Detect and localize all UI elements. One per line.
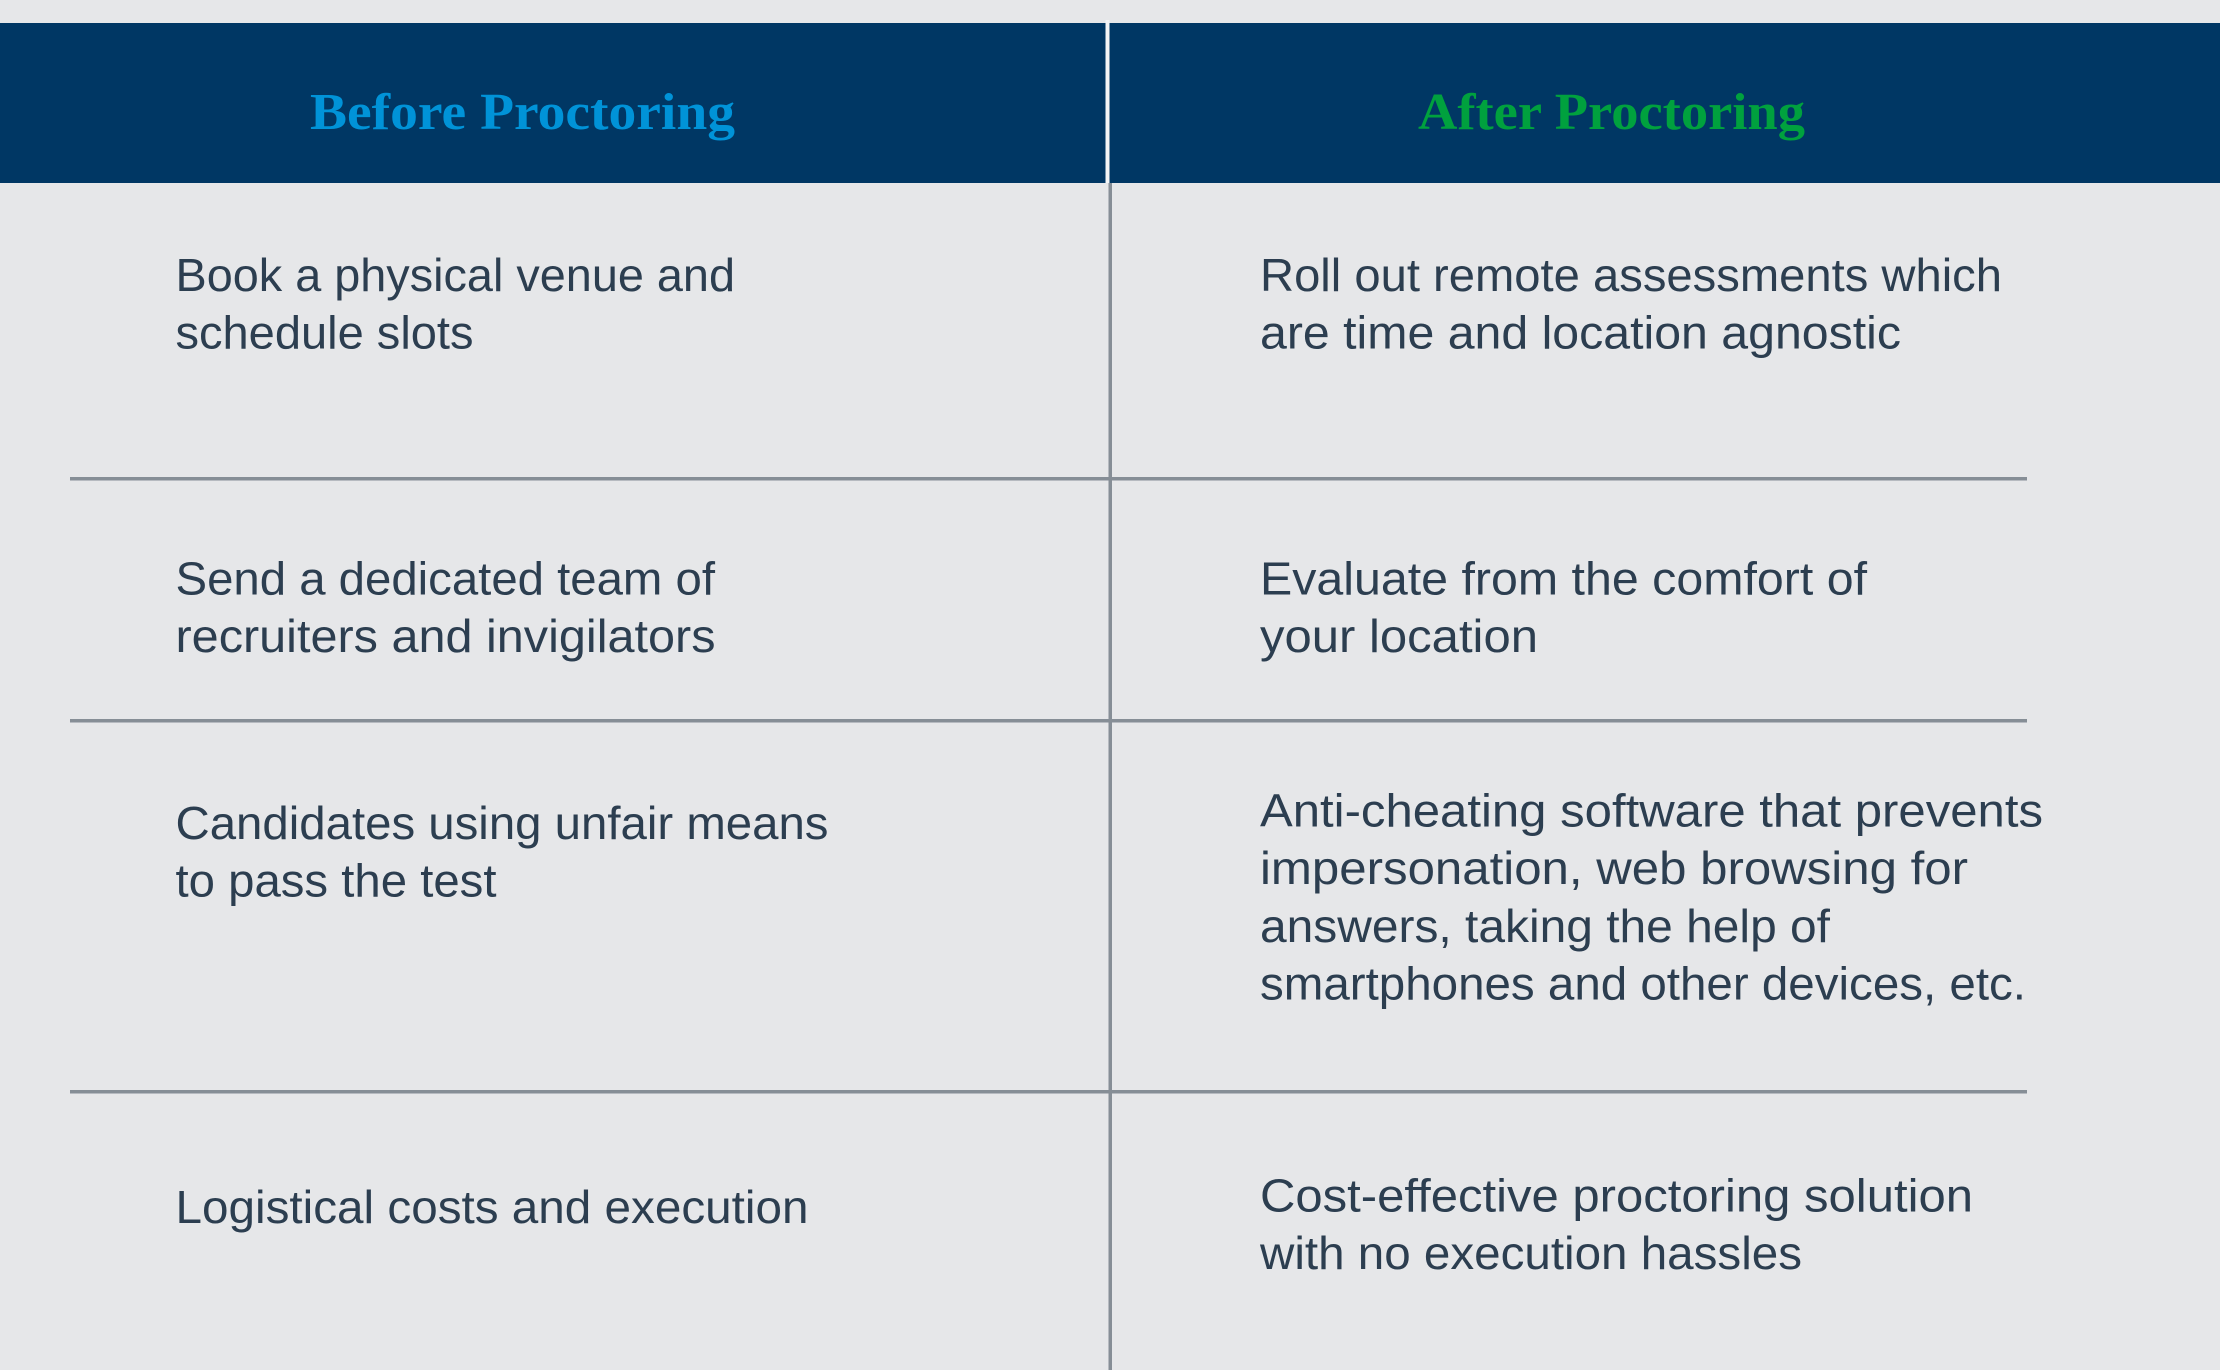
before row 3 text: to pass the test [176,854,497,906]
after row 3 text: answers, taking the help of [1260,900,1830,952]
before row 3 text: Candidates using unfair means [176,797,828,849]
after row 3 text [1260,784,2043,1010]
after row 2 text: your location [1260,610,1538,662]
before row 2 text: Send a dedicated team of [176,552,715,604]
after row 2 text: Evaluate from the comfort of [1260,552,1867,604]
header band [0,23,2220,183]
heading: before proctoring: Before Proctoring [310,84,735,141]
before row 2 text: recruiters and invigilators [176,610,716,662]
before row 1 text: Book a physical venue and [176,249,735,301]
before row 1 text [176,249,735,358]
after row 4 text [1259,1170,1973,1279]
before row 3 text [176,797,828,906]
after row 3 text: Anti-cheating software that prevents [1260,784,2043,836]
after row 4 text: Cost-effective proctoring solution [1260,1170,1973,1222]
after row 1 text [1260,249,2002,358]
before row 2 text [176,552,716,662]
heading: after proctoring: After Proctoring [1418,84,1805,141]
before row 1 text: schedule slots [176,306,474,358]
before row 4 text: Logistical costs and execution [176,1181,808,1233]
after row 2 text [1260,552,1867,662]
after row 3 text: impersonation, web browsing for [1260,842,1968,894]
after row 3 text: smartphones and other devices, etc. [1260,958,2026,1010]
after row 4 text: with no execution hassles [1259,1227,1802,1279]
after row 1 text: Roll out remote assessments which [1260,249,2002,301]
after row 1 text: are time and location agnostic [1260,306,1901,358]
